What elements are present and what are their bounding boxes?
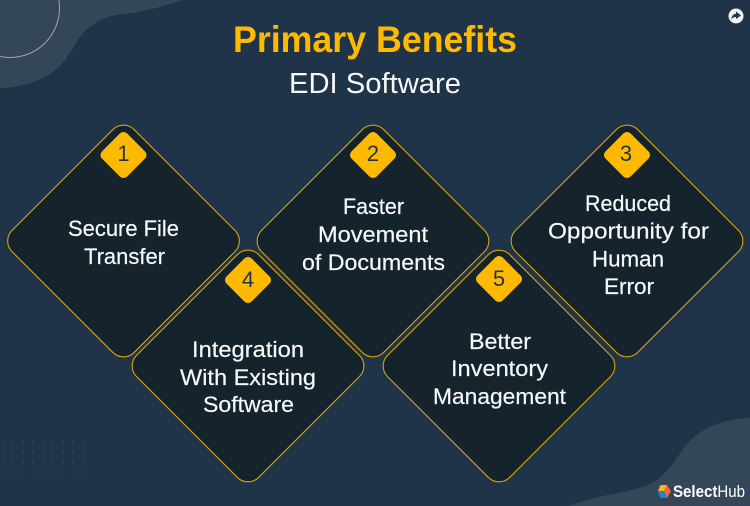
benefit 3 text: Opportunity for: [548, 218, 710, 244]
badge 4: [223, 255, 273, 305]
benefit 4 text: With Existing: [180, 365, 316, 390]
badge 4: 4: [242, 267, 254, 292]
icon: share: [728, 8, 744, 24]
badge 3: [602, 130, 652, 180]
benefit 5 text: [433, 329, 567, 409]
badge 1: [98, 130, 149, 180]
panel: benefit 3: [505, 119, 749, 363]
decorative blob: top left: [0, 0, 182, 88]
benefit 1 text: Secure File: [68, 216, 179, 241]
benefit 3 text: Human: [592, 246, 664, 272]
badge 5: [474, 254, 524, 304]
benefit 5 text: Inventory: [451, 356, 549, 381]
benefit 2 text: Movement: [318, 222, 429, 247]
benefit 5 text: Management: [433, 384, 567, 409]
benefit 4 text: [180, 337, 316, 417]
benefit 3 text: Error: [604, 274, 655, 299]
benefit 3 text: Reduced: [585, 191, 671, 216]
decorative blob: bottom right: [567, 418, 750, 506]
panel: benefit 4: [126, 244, 370, 488]
benefit 3 text: [548, 191, 710, 299]
benefit 2 text: Faster: [343, 194, 404, 219]
panel: benefit 5: [377, 244, 621, 488]
benefit 2 text: of Documents: [302, 250, 445, 275]
benefit 1 text: [68, 216, 179, 269]
badge 2: [348, 130, 398, 180]
benefit 4 text: Integration: [192, 337, 304, 362]
badge 5: 5: [493, 266, 505, 291]
dot grid: [2, 441, 84, 473]
badge 2: 2: [367, 141, 379, 166]
title: Primary Benefits: [233, 19, 517, 60]
benefit 1 text: Transfer: [84, 244, 165, 269]
badge 1: 1: [117, 141, 130, 166]
benefit 5 text: Better: [469, 329, 532, 354]
subtitle: EDI Software: [289, 68, 461, 100]
panel: benefit 1: [1, 119, 246, 363]
badge 3: 3: [620, 141, 632, 166]
panel: benefit 2: [251, 119, 495, 363]
benefit 2 text: [302, 194, 445, 275]
benefit 4 text: Software: [203, 392, 294, 417]
logo: SelectHub: SelectHub: [673, 483, 745, 501]
